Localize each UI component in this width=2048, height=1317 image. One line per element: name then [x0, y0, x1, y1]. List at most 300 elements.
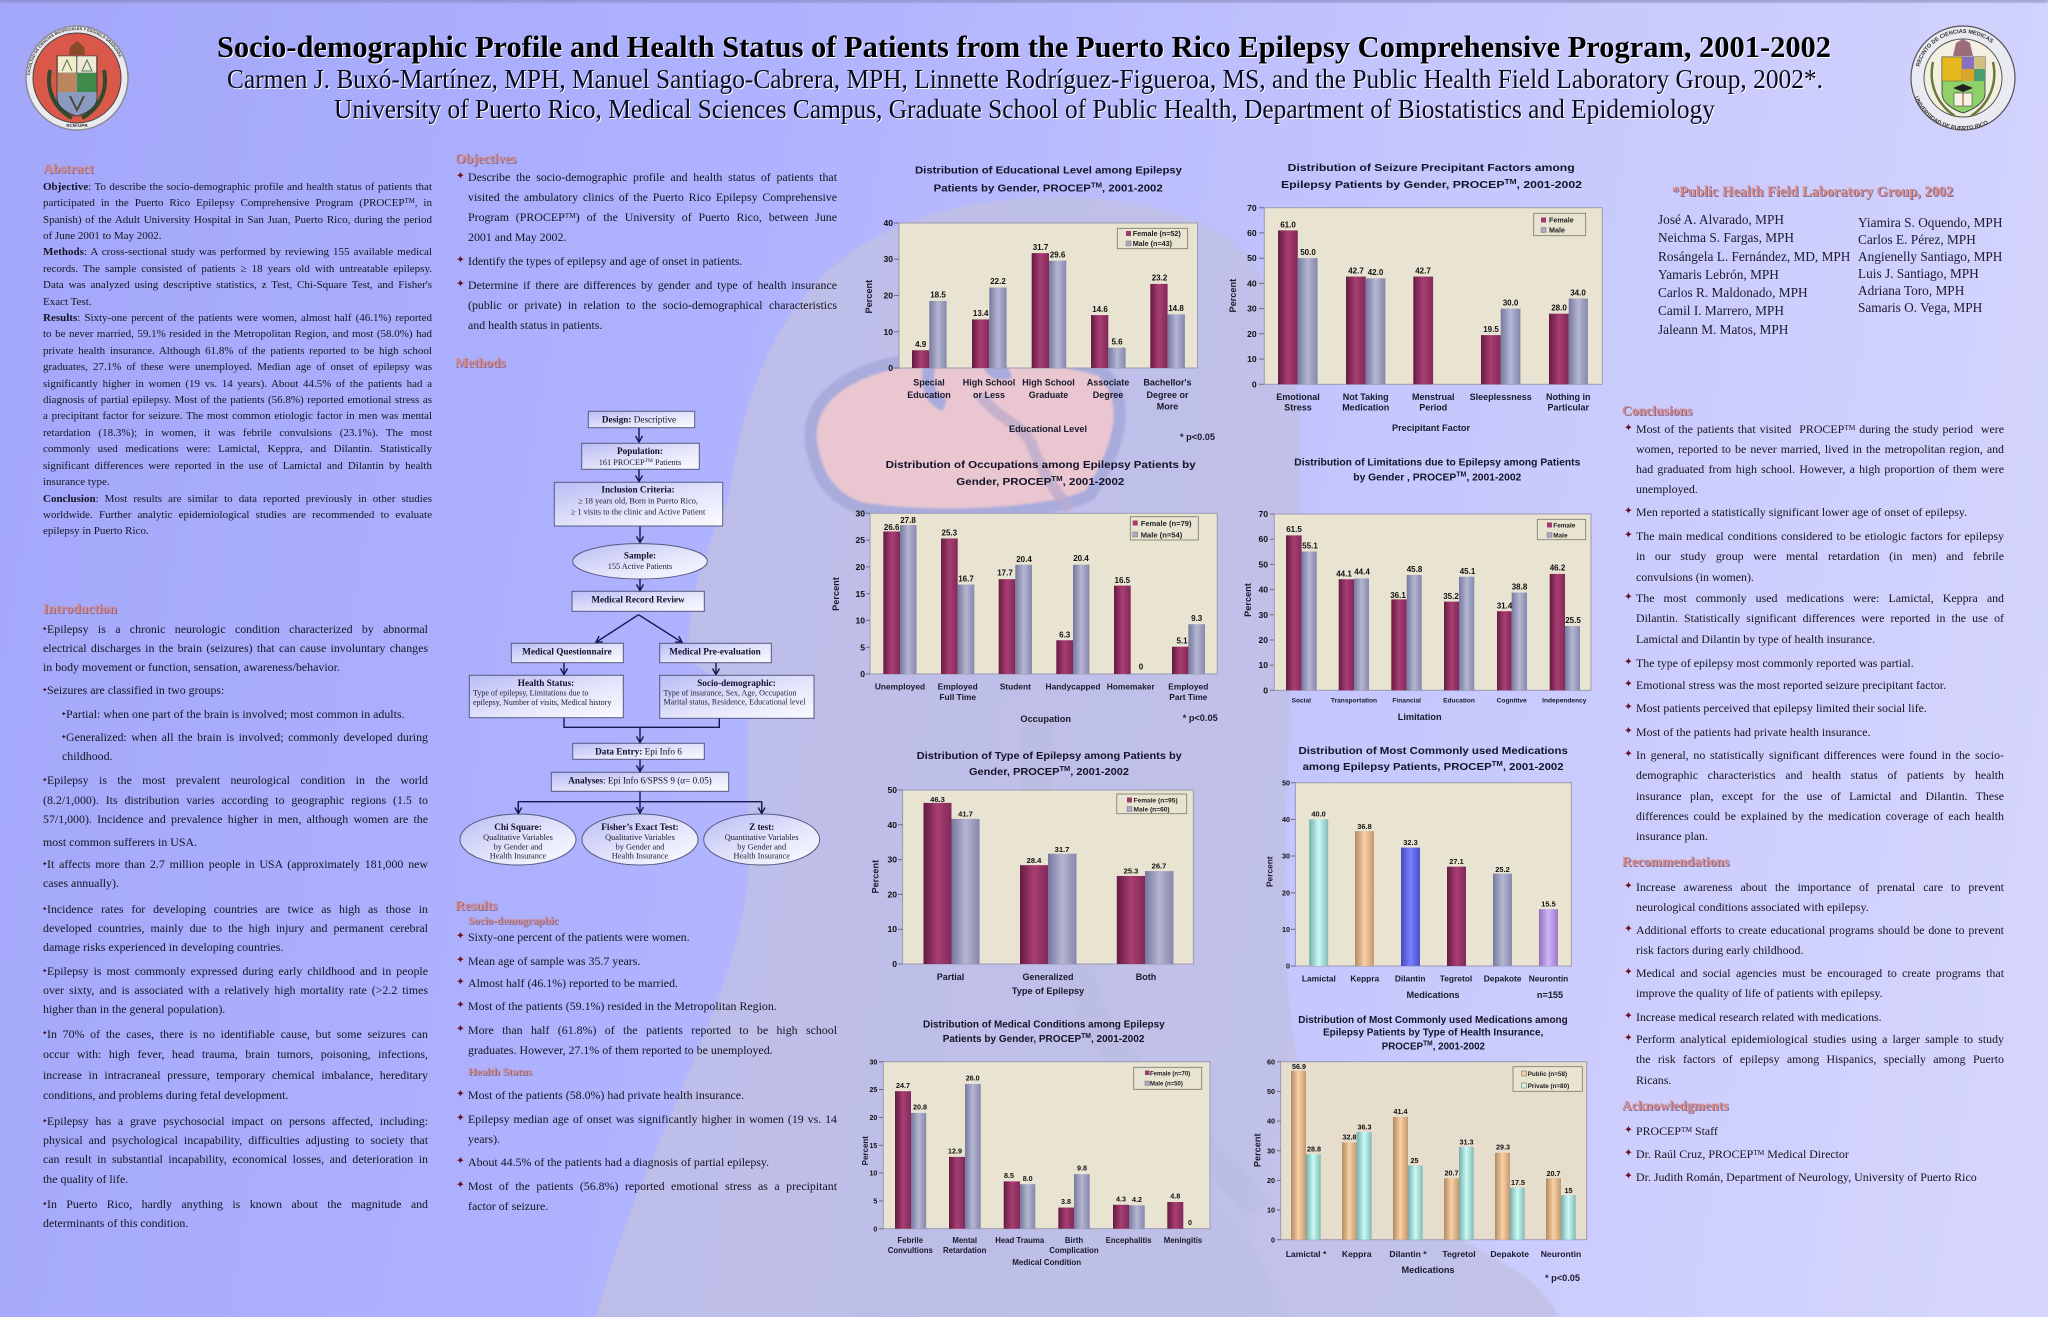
chart: medical conditions by gender: 25: [870, 1087, 877, 1094]
chart: educational level by gender: 23.2: [1152, 274, 1168, 282]
text block: abstract: diagnosis of partial epilepsy. Most of the patients (56.8%) reported emotional stress as: [43, 394, 432, 406]
chart: type of epilepsy by gender: 20: [887, 890, 897, 900]
recommendation 5: Perform analytical epidemiological studies using a larger sample to study: [1636, 1032, 2004, 1046]
chart: seizure precipitant factors: Particular: [1548, 402, 1590, 412]
chart: medical conditions by gender: 5: [873, 1198, 877, 1206]
chart: medical conditions by gender: 4.2: [1132, 1195, 1142, 1204]
chart: limitations by gender: 31.4: [1497, 602, 1513, 610]
text block: abstract: insurance type.: [43, 476, 110, 488]
chart: type of epilepsy by gender: Partial: [937, 972, 964, 982]
result: education: More than half (61.8%) of the patients reported to be high school: [468, 1022, 837, 1036]
chart: seizure precipitant factors: 0: [1252, 380, 1257, 390]
chart: type of epilepsy by gender: [870, 751, 1193, 996]
conclusion 8: Most of the patients had private health insurance.: [1636, 725, 1870, 739]
conclusion 4: The most commonly used medications were: Lamictal, Keppra and: [1636, 591, 2004, 605]
chart: medications by health insurance: 20.7: [1444, 1168, 1458, 1178]
chart: most commonly used medications: 25.2: [1495, 865, 1510, 874]
chart: most commonly used medications: 27.1: [1449, 857, 1464, 866]
chart: limitations by gender: 46.2: [1550, 564, 1566, 572]
chart: most commonly used medications: 32.3: [1403, 838, 1418, 847]
intro paragraph: USA burden: [43, 855, 428, 894]
chart: medical conditions by gender: Head Trauma: [995, 1236, 1045, 1245]
recommendation 1: neurological conditions associated with epilepsy.: [1636, 900, 1869, 914]
recommendation 5: [1636, 1029, 2004, 1090]
chart: most commonly used medications: Lamictal: [1302, 974, 1336, 984]
chart: limitations by gender: 36.1: [1390, 591, 1406, 600]
flowchart: study methods: Z test:: [749, 822, 774, 832]
intro paragraph: developing countries: Incidence rates for developing countries are twice as high as those in: [47, 902, 428, 916]
chart: medical conditions by gender: 9.8: [1077, 1164, 1087, 1172]
chart: seizure precipitant factors: 61.0: [1280, 220, 1296, 230]
chart: seizure precipitant factors: 19.5: [1483, 325, 1499, 334]
chart: medical conditions by gender: , 2001-2002: [1091, 1034, 1145, 1045]
conclusion 9: insurance plan.: [1636, 829, 1708, 843]
text block: abstract: worldwide. Further analytic epidemiological studies are recommended to evaluate: [43, 509, 432, 521]
chart: educational level by gender: 30: [883, 254, 893, 264]
chart: medications by health insurance: Dilantin *: [1389, 1249, 1427, 1259]
chart: medical conditions by gender: Percent: [861, 1136, 870, 1165]
result: onset: [468, 1108, 837, 1149]
chart: seizure precipitant factors: 20: [1247, 329, 1257, 339]
chart: limitations by gender: 50: [1258, 560, 1268, 570]
result: emotional stress: Most of the patients (56.8%) reported emotional stress as a precipitant: [468, 1178, 837, 1192]
chart: medications by health insurance: Tegretol: [1442, 1249, 1476, 1259]
chart: type of epilepsy by gender: 25.3: [1124, 866, 1138, 876]
chart: occupations by gender: Percent: [831, 577, 841, 611]
chart: seizure precipitant factors: Emotional: [1276, 392, 1320, 402]
recommendation 2: risk factors during early childhood.: [1636, 943, 1803, 957]
chart: medications by health insurance: 17.5: [1511, 1178, 1525, 1187]
chart: medications by health insurance: 10: [1267, 1206, 1275, 1214]
intro paragraph: psychosocial impact: the quality of life.: [43, 1172, 128, 1186]
intro paragraph: psychosocial impact: Epilepsy has a grave psychosocial impact on persons affected, including:: [47, 1114, 428, 1128]
chart: type of epilepsy by gender: Generalized: [1022, 972, 1074, 982]
chart: occupations by gender: 26.6: [884, 523, 900, 532]
chart: occupations by gender: 25.3: [942, 528, 958, 538]
flowchart: study methods: ≥ 1 visits to the clinic and Active Patient: [571, 508, 706, 516]
intro paragraph: Puerto Rico: determinants of this condition.: [43, 1216, 188, 1230]
chart: limitations by gender: 45.1: [1460, 567, 1476, 576]
chart: occupations by gender: Part Time: [1169, 692, 1208, 702]
chart: seizure precipitant factors: 30.0: [1503, 298, 1519, 308]
chart: seizure precipitant factors: Nothing in: [1546, 392, 1591, 402]
chart: occupations by gender: Student: [1000, 682, 1031, 692]
heading: results: Results: [455, 898, 497, 912]
chart: most commonly used medications: 20: [1282, 888, 1290, 898]
chart: occupations by gender: Female (n=79): [1141, 519, 1192, 528]
chart: educational level by gender: 20: [883, 290, 893, 300]
chart: seizure precipitant factors: Medication: [1342, 402, 1389, 412]
flowchart: study methods: by Gender and: [616, 842, 665, 852]
chart: seizure precipitant factors: Male: [1549, 226, 1565, 234]
chart: medical conditions by gender: 26.0: [966, 1074, 980, 1082]
chart: seizure precipitant factors: Epilepsy Patients by Gender, PROCEP: [1281, 180, 1469, 191]
chart: occupations by gender: 15: [855, 589, 865, 599]
text block: abstract: graduates, 27.1% of these were unemployed. Median age of onset of epilepsy was: [43, 361, 432, 373]
chart: type of epilepsy by gender: , 2001-2002: [1070, 767, 1129, 778]
chart: medical conditions by gender: TM: [1081, 1033, 1091, 1040]
chart: seizure precipitant factors: 42.0: [1368, 268, 1384, 277]
chart: medical conditions by gender: Convultions: [888, 1246, 933, 1255]
chart: seizure precipitant factors: , 2001-2002: [1517, 180, 1582, 191]
chart: medications by health insurance: Percent: [1253, 1133, 1263, 1167]
chart: medical conditions by gender: [861, 1020, 1210, 1267]
text block: abstract: Results: Sixty-one percent of the patients were women, almost half (46.1%) reported: [43, 312, 432, 324]
chart: medical conditions by gender: Retardation: [943, 1246, 987, 1255]
chart: educational level by gender: 10: [883, 327, 893, 337]
left logo: school seal: RCM-UPR: [66, 123, 88, 128]
objective 3: (public or private) in relation to the socio-demographical characteristics: [468, 298, 837, 312]
chart: occupations by gender: Employed: [938, 682, 978, 692]
chart: type of epilepsy by gender: Distribution of Type of Epilepsy among Patients by: [917, 751, 1182, 762]
intro paragraph: causes: [43, 1024, 428, 1106]
flowchart: study methods: ≥ 18 years old, Born in Puerto Rico,: [578, 496, 698, 506]
flowchart: study methods: Health Insurance: [733, 852, 790, 860]
chart: educational level by gender: 13.4: [973, 309, 989, 318]
heading: acknowledgments: Acknowledgments: [1622, 1098, 1728, 1113]
chart: most commonly used medications: , 2001-2002: [1503, 762, 1564, 773]
chart: educational level by gender: 5.6: [1111, 338, 1123, 346]
heading: methods: Methods: [455, 355, 506, 370]
chart: medical conditions by gender: Distribution of Medical Conditions among Epilepsy: [923, 1020, 1165, 1030]
acknowledgment 3: Dr. Judith Román, Department of Neurology, University of Puerto Rico: [1636, 1170, 1977, 1184]
result: onset: years).: [468, 1132, 500, 1146]
text block: abstract: of June 2001 to May 2002.: [43, 230, 162, 242]
chart: educational level by gender: 4.9: [915, 340, 927, 349]
chart: medications by health insurance: Distribution of Most Commonly used Medications among: [1298, 1015, 1568, 1026]
acknowledgment 1: PROCEPTM Staff: [1636, 1124, 1718, 1138]
conclusion 9: differences could be explained by the medication coverage of each health: [1636, 809, 2004, 823]
flowchart: study methods: Data Entry: Epi Info 6: [595, 746, 682, 756]
chart: medications by health insurance: Lamictal *: [1286, 1249, 1327, 1259]
text block: abstract: Conclusion: Most results are similar to data reported previously in other studies: [43, 493, 432, 505]
chart: occupations by gender: 30: [855, 508, 865, 518]
chart: medications by health insurance: Medications: [1401, 1265, 1455, 1275]
chart: occupations by gender: Unemployed: [875, 682, 925, 692]
intro paragraph: psychosocial impact: physical and psychological incapability, difficulties adjusting to society that: [43, 1133, 428, 1147]
chart: type of epilepsy by gender: 46.3: [930, 795, 945, 804]
chart: most commonly used medications: 40: [1282, 815, 1290, 824]
chart: limitations by gender: 44.4: [1354, 568, 1370, 576]
objective 1: 2001 and May 2002.: [468, 230, 566, 244]
chart: medical conditions by gender: 0: [1188, 1218, 1192, 1227]
intro paragraph: prevalence: (8.2/1,000). Its distribution varies according to geographic regions (1.5 to: [43, 793, 428, 807]
chart: medications by health insurance: Keppra: [1342, 1249, 1372, 1259]
chart: medications by health insurance: Public (n=58): [1528, 1071, 1567, 1078]
chart: educational level by gender: Patients by Gender, PROCEP: [934, 184, 1076, 194]
objective 3: Determine if there are differences by gender and type of health insurance: [468, 278, 837, 292]
flowchart: study methods: Type of epilepsy, Limitations due to: [473, 688, 588, 698]
chart: seizure precipitant factors: Not Taking: [1343, 392, 1389, 402]
recommendation 1: Increase awareness about the importance of prenatal care to prevent: [1636, 880, 2004, 894]
chart: medications by health insurance: PROCEP: [1382, 1042, 1425, 1052]
chart: type of epilepsy by gender: 10: [887, 924, 897, 934]
chart: seizure precipitant factors: TM: [1505, 179, 1517, 186]
chart: occupations by gender: Gender, PROCEP: [956, 477, 1041, 488]
names: first column: Carlos R. Maldonado, MPH: [1658, 285, 1808, 300]
text block: abstract: retardation (18.3%); in women, it was febrile convulsions (23.1%). The most: [43, 427, 432, 439]
flowchart: study methods: [460, 411, 820, 865]
chart: occupations by gender: , 2001-2002: [1063, 477, 1125, 488]
chart: limitations by gender: Female: [1553, 522, 1576, 530]
chart: occupations by gender: Handycapped: [1046, 682, 1100, 692]
chart: occupations by gender: 6.3: [1059, 630, 1071, 640]
heading: conclusions: Conclusions: [1622, 403, 1692, 418]
chart: occupations by gender: 25: [855, 535, 865, 545]
chart: medical conditions by gender: 4.3: [1116, 1194, 1126, 1204]
chart: occupations by gender: Distribution of Occupations among Epilepsy Patients by: [886, 460, 1196, 471]
intro sub-item: partial: Partial: when one part of the brain is involved; most common in adults.: [66, 706, 404, 720]
chart: medical conditions by gender: Female (n=70): [1150, 1071, 1190, 1077]
chart: educational level by gender: Degree or: [1146, 390, 1189, 400]
text block: abstract: private health insurance. Although 61.8% of the patients reported to be high school: [43, 345, 432, 357]
flowchart: study methods: by Gender and: [494, 842, 543, 852]
chart: type of epilepsy by gender: 40: [887, 820, 897, 830]
subheading: health status: Health Status: [468, 1066, 532, 1078]
names: first column: Yamaris Lebrón, MPH: [1658, 267, 1779, 282]
conclusion 1: [1636, 418, 2004, 500]
result: education: graduates. However, 27.1% of them reported to be unemployed.: [468, 1043, 773, 1057]
heading: objectives: Objectives: [455, 151, 516, 166]
chart: type of epilepsy by gender: 50: [887, 785, 897, 795]
chart: medical conditions by gender: 20.8: [913, 1102, 927, 1112]
title block: Carmen J. Buxó-Martínez, MPH, Manuel Santiago-Cabrera, MPH, Linnette Rodríguez-Figueroa, MS, and the Public Health Field Laboratory Group, 2002*.: [227, 64, 1823, 94]
chart: limitations by gender: 45.8: [1407, 565, 1423, 574]
chart: occupations by gender: Occupation: [1020, 714, 1071, 724]
chart: seizure precipitant factors: Percent: [1228, 279, 1238, 313]
chart: medical conditions by gender: Complication: [1049, 1246, 1099, 1255]
chart: most commonly used medications: [1264, 746, 1571, 1000]
acknowledgment 2: Dr. Raúl Cruz, PROCEPTM Medical Director: [1636, 1147, 1849, 1161]
conclusion 5: The type of epilepsy most commonly reported was partial.: [1636, 656, 1914, 670]
chart: seizure precipitant factors: Distribution of Seizure Precipitant Factors among: [1288, 163, 1575, 174]
chart: limitations by gender: , 2001-2002: [1466, 472, 1522, 484]
result: married: Almost half (46.1%) reported to be married.: [468, 976, 678, 990]
chart: medical conditions by gender: Meningitis: [1164, 1236, 1203, 1245]
chart: occupations by gender: 20.4: [1073, 554, 1089, 563]
text block: abstract: participated in the Puerto Rico Epilepsy Comprehensive Program (PROCEPTM, in: [43, 197, 432, 209]
chart: educational level by gender: [864, 166, 1215, 442]
chart: medications by health insurance: 31.3: [1460, 1138, 1474, 1146]
chart: medications by health insurance: [1253, 1015, 1587, 1283]
chart: medications by health insurance: 60: [1267, 1058, 1275, 1066]
chart: medications by health insurance: Private (n=80): [1528, 1083, 1569, 1090]
chart: seizure precipitant factors: 40: [1247, 278, 1257, 288]
flowchart: study methods: Socio-demographic:: [697, 678, 776, 688]
chart: most commonly used medications: Tegretol: [1440, 974, 1472, 984]
chart: medications by health insurance: Depakote: [1490, 1249, 1529, 1259]
conclusion 3: in our study group were mental retardation (in men) and febrile: [1636, 549, 2004, 563]
chart: type of epilepsy by gender: Type of Epilepsy: [1012, 986, 1085, 996]
names: first column: Jaleann M. Matos, MPH: [1658, 322, 1788, 337]
flowchart: study methods: Quantitative Variables: [725, 833, 799, 842]
text block: abstract: Objective: To describe the socio-demographic profile and health status of patients that: [43, 181, 432, 193]
chart: medications by health insurance: 56.9: [1292, 1062, 1306, 1071]
chart: educational level by gender: High School: [1022, 378, 1075, 388]
chart: most commonly used medications: Keppra: [1350, 974, 1380, 984]
chart: educational level by gender: Educational Level: [1009, 424, 1087, 434]
chart: seizure precipitant factors: Sleeplessness: [1470, 392, 1532, 402]
chart: occupations by gender: Full Time: [939, 692, 976, 702]
chart: most commonly used medications: 30: [1282, 852, 1290, 860]
chart: type of epilepsy by gender: 28.4: [1027, 856, 1042, 865]
intro paragraph: developing countries: [43, 900, 428, 958]
heading: abstract: Abstract: [43, 161, 94, 176]
chart: most commonly used medications: 15.5: [1541, 900, 1556, 908]
chart: limitations by gender: 44.1: [1336, 570, 1352, 578]
recommendation 2: [1636, 920, 2004, 961]
recommendation 5: the risk factors of epilepsy among Hispanics, specially among Puerto: [1636, 1052, 2004, 1066]
chart: type of epilepsy by gender: Percent: [870, 860, 880, 894]
chart: limitations by gender: by Gender , PROCEP: [1353, 472, 1456, 484]
chart: limitations by gender: 55.1: [1302, 542, 1318, 550]
chart: type of epilepsy by gender: Female (n=95): [1134, 798, 1178, 804]
intro sub-item: generalized: Generalized: when all the brain is involved; commonly developed during: [66, 730, 428, 744]
chart: medications by health insurance: TM: [1423, 1040, 1433, 1048]
flowchart: study methods: by Gender and: [737, 842, 787, 852]
conclusion 9: demographic characteristics and health status of patients by health: [1636, 768, 2004, 782]
flowchart: study methods: Marital status, Residence, Educational level: [664, 698, 806, 706]
flowchart: study methods: 161 PROCEP: [599, 458, 645, 467]
chart: limitations by gender: Independency: [1542, 698, 1587, 704]
chart: seizure precipitant factors: Menstrual: [1412, 392, 1455, 402]
chart: medications by health insurance: 50: [1267, 1087, 1275, 1096]
chart: limitations by gender: Education: [1443, 698, 1475, 704]
chart: limitations by gender: [1243, 458, 1591, 722]
chart: limitations by gender: Percent: [1243, 583, 1253, 617]
chart: limitations by gender: 0: [1263, 686, 1268, 696]
chart: occupations by gender: Employed: [1168, 682, 1208, 692]
names: second column: [1858, 215, 2002, 315]
chart: educational level by gender: or Less: [973, 390, 1005, 400]
names: first column: Camil I. Marrero, MPH: [1658, 303, 1784, 318]
chart: limitations by gender: Male: [1553, 532, 1568, 540]
chart: limitations by gender: 70: [1258, 509, 1268, 519]
chart: educational level by gender: Percent: [864, 280, 874, 314]
intro paragraph: USA burden: cases annually).: [43, 876, 119, 890]
text block: abstract: records. The sample consisted of patients ≥ 18 years old with untreatable epilepsy.: [43, 263, 432, 275]
flowchart: study methods: Design: Descriptive: [602, 414, 676, 424]
recommendation 5: Ricans.: [1636, 1073, 1671, 1087]
chart: most commonly used medications: TM: [1492, 761, 1503, 768]
names: first column: [1658, 212, 1850, 337]
chart: occupations by gender: TM: [1051, 476, 1063, 483]
recommendation 3: improve the quality of life of patients with epilepsy.: [1636, 986, 1883, 1000]
names: second column: Adriana Toro, MPH: [1858, 283, 1964, 298]
chart: medications by health insurance: , 2001-2002: [1433, 1042, 1485, 1052]
chart: seizure precipitant factors: Precipitant Factor: [1392, 423, 1470, 433]
chart: medications by health insurance: Neurontin: [1541, 1249, 1581, 1259]
conclusion 1: had graduated from high school. However, a high proportion of them were: [1636, 462, 2004, 476]
intro paragraph: causes: In 70% of the cases, there is no identifiable cause, but some seizures can: [47, 1027, 428, 1041]
chart: medications by health insurance: 29.3: [1496, 1142, 1510, 1152]
conclusion 9: [1636, 745, 2004, 846]
chart: type of epilepsy by gender: 41.7: [958, 810, 973, 818]
chart: medications by health insurance: 25: [1410, 1156, 1418, 1165]
chart: occupations by gender: 0: [1139, 662, 1144, 672]
intro paragraph: prevalence: Epilepsy is the most prevalent neurological condition in the world: [47, 773, 428, 787]
title block: University of Puerto Rico, Medical Sciences Campus, Graduate School of Public Health, Department of Biostatistics and Epidemiology: [334, 94, 1715, 124]
intro sub-item: generalized: childhood.: [62, 749, 113, 763]
intro paragraph: age and mortality: higher than in the general population).: [43, 1002, 225, 1016]
conclusion 9: In general, no statistically significant differences were found in the socio-: [1636, 748, 2004, 762]
chart: occupations by gender: 5.1: [1176, 636, 1188, 646]
chart: medications by health insurance: 0: [1271, 1236, 1275, 1244]
flowchart: study methods: Patients: [653, 458, 681, 467]
chart: limitations by gender: 30: [1258, 610, 1268, 620]
intro paragraph: psychosocial impact: can result in substantial incapability, economical losses, and deterioration in: [43, 1152, 428, 1166]
chart: educational level by gender: 40: [883, 218, 893, 228]
chart: limitations by gender: Distribution of Limitations due to Epilepsy among Patients: [1294, 458, 1581, 468]
chart: medical conditions by gender: 3.8: [1061, 1197, 1071, 1206]
chart: seizure precipitant factors: 30: [1247, 304, 1257, 314]
chart: medications by health insurance: 41.4: [1394, 1107, 1408, 1116]
chart: occupations by gender: 9.3: [1191, 614, 1203, 623]
chart: seizure precipitant factors: Period: [1419, 402, 1447, 412]
chart: educational level by gender: Female (n=52): [1133, 229, 1181, 238]
chart: medical conditions by gender: Encephalitis: [1106, 1236, 1152, 1245]
conclusion 4: Lamictal and Dilantin by type of health insurance.: [1636, 632, 1875, 646]
names: first column: Rosángela L. Fernández, MD, MPH: [1658, 249, 1850, 264]
recommendation 1: [1636, 877, 2004, 918]
chart: educational level by gender: Bachellor's: [1143, 378, 1192, 388]
chart: seizure precipitant factors: 42.7: [1415, 266, 1431, 276]
chart: limitations by gender: 10: [1258, 660, 1268, 670]
chart: type of epilepsy by gender: Both: [1136, 972, 1156, 982]
flowchart: study methods: epilepsy, Number of visits, Medical history: [473, 698, 611, 707]
chart: medications by health insurance: 30: [1267, 1146, 1275, 1156]
chart: limitations by gender: Limitation: [1398, 712, 1442, 722]
chart: limitations by gender: 25.5: [1565, 616, 1581, 625]
chart: medical conditions by gender: Patients by Gender, PROCEP: [943, 1034, 1085, 1045]
chart: limitations by gender: 35.2: [1443, 592, 1459, 601]
objective 3: [468, 274, 837, 335]
text block: abstract: significant differences were reported in the use of Lamictal and Dilantin by health: [43, 460, 432, 472]
left logo: school seal: FACULTAD DE CIENCIAS BIOSOCIALES Y ESCUELA GRADUADA: [27, 27, 122, 75]
text block: abstract: Spanish) of the Adult University Hospital in San Juan, Puerto Rico, during the period: [43, 214, 432, 226]
chart: seizure precipitant factors: Female: [1549, 216, 1574, 224]
intro paragraph: causes: conditions, and problems during fetal development.: [43, 1088, 288, 1102]
flowchart: study methods: Qualitative Variables: [483, 833, 553, 842]
chart: seizure precipitant factors: 42.7: [1348, 266, 1364, 276]
chart: educational level by gender: Associate: [1087, 378, 1129, 388]
chart: most commonly used medications: Neurontin: [1529, 974, 1568, 984]
chart: type of epilepsy by gender: TM: [1059, 766, 1070, 773]
chart: most commonly used medications: Medications: [1406, 990, 1460, 1000]
chart: occupations by gender: 27.8: [900, 516, 916, 525]
chart: type of epilepsy by gender: 30: [887, 854, 897, 864]
chart: most commonly used medications: 50: [1282, 778, 1290, 788]
flowchart: study methods: Medical Pre-evaluation: [669, 646, 761, 656]
chart: limitations by gender: Cognitive: [1497, 698, 1527, 704]
chart: occupations by gender: 20: [855, 562, 865, 572]
objective 1: visited the ambulatory clinics of the Puerto Rico Epilepsy Comprehensive: [468, 190, 837, 204]
chart: limitations by gender: 61.5: [1286, 525, 1302, 534]
result: insurance: Most of the patients (58.0%) had private health insurance.: [468, 1088, 744, 1102]
recommendation 3: Medical and social agencies must be encouraged to create programs that: [1636, 966, 2004, 980]
chart: medical conditions by gender: Mental: [952, 1236, 977, 1245]
intro paragraph: definition: in body movement or function, sensation, awareness/behavior.: [43, 660, 340, 674]
intro paragraph: definition: electrical discharges in the brain (seizures) that can cause involuntary changes: [43, 641, 428, 655]
chart: medications by health insurance: 40: [1267, 1116, 1275, 1126]
chart: occupations by gender: 0: [860, 669, 865, 679]
chart: educational level by gender: 18.5: [930, 290, 946, 300]
intro paragraph: Puerto Rico: [43, 1194, 428, 1233]
flowchart: study methods: 155 Active Patients: [608, 562, 672, 571]
chart: educational level by gender: Distribution of Educational Level among Epilepsy: [915, 166, 1182, 176]
chart: seizure precipitant factors: 70: [1247, 203, 1257, 213]
chart: limitations by gender: TM: [1456, 472, 1467, 478]
